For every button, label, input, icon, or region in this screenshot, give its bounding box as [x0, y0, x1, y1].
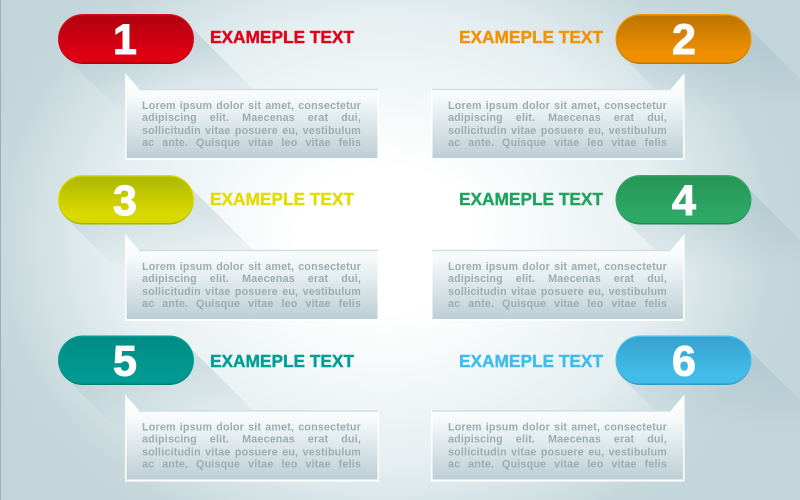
callout box 2: Lorem ipsum dolor sit amet, consectetur [448, 100, 667, 112]
pill: number 5: 5 [113, 338, 137, 386]
heading 4: EXAMEPLE TEXT [459, 189, 603, 209]
pill: number 6 [616, 336, 752, 386]
callout box 1: ac ante. Quisque vitae leo vitae felis [142, 137, 361, 149]
pill: number 3: 3 [113, 177, 137, 225]
callout box 4: Lorem ipsum dolor sit amet, consectetur [448, 261, 667, 273]
callout box 1: Lorem ipsum dolor sit amet, consectetur [142, 100, 361, 112]
callout box 5: ac ante. Quisque vitae leo vitae felis [142, 459, 361, 471]
callout box 3: ac ante. Quisque vitae leo vitae felis [142, 298, 361, 310]
panel: item 5 [58, 336, 379, 482]
heading 5: EXAMEPLE TEXT [210, 351, 354, 371]
callout box 6: sollicitudin vitae posuere eu, vestibulum [448, 446, 667, 458]
panel: item 2 [431, 14, 800, 160]
panel: item 4 [431, 175, 800, 321]
panel: item 1 [58, 14, 379, 160]
callout box 3 [125, 234, 379, 321]
heading 6: EXAMEPLE TEXT [459, 351, 603, 371]
callout box 5 [125, 394, 379, 482]
pill: number 1 [58, 14, 194, 64]
pill: number 6: 6 [672, 338, 696, 386]
pill: number 2 [616, 14, 752, 64]
pill: number 2: 2 [672, 16, 696, 64]
callout box 2: sollicitudin vitae posuere eu, vestibulum [448, 125, 667, 137]
callout box 2: adipiscing elit. Maecenas erat dui, [448, 112, 667, 124]
callout box 6: ac ante. Quisque vitae leo vitae felis [448, 459, 667, 471]
callout box 6 [431, 394, 684, 482]
panel: item 3 [58, 175, 379, 321]
callout box 2: ac ante. Quisque vitae leo vitae felis [448, 137, 667, 149]
pill: number 4: 4 [672, 177, 696, 225]
callout box 4: sollicitudin vitae posuere eu, vestibulum [448, 286, 667, 298]
callout box 3: adipiscing elit. Maecenas erat dui, [142, 273, 361, 285]
pill: number 1: 1 [113, 16, 137, 64]
callout box 1 [125, 73, 379, 160]
callout box 6: adipiscing elit. Maecenas erat dui, [448, 434, 667, 446]
callout box 4: adipiscing elit. Maecenas erat dui, [448, 273, 667, 285]
heading 1: EXAMEPLE TEXT [210, 27, 354, 47]
panel: item 6 [431, 336, 800, 482]
pill: number 4 [616, 175, 752, 225]
callout box 5: Lorem ipsum dolor sit amet, consectetur [142, 422, 361, 434]
heading 3: EXAMEPLE TEXT [210, 189, 354, 209]
pill: number 3 [58, 175, 194, 225]
callout box 4 [431, 234, 684, 321]
heading 2: EXAMEPLE TEXT [459, 27, 603, 47]
callout box 2 [431, 73, 684, 160]
callout box 1: adipiscing elit. Maecenas erat dui, [142, 112, 361, 124]
callout box 3: sollicitudin vitae posuere eu, vestibulum [142, 286, 361, 298]
pill: number 5 [58, 336, 194, 386]
callout box 4: ac ante. Quisque vitae leo vitae felis [448, 298, 667, 310]
callout box 5: sollicitudin vitae posuere eu, vestibulum [142, 446, 361, 458]
callout box 5: adipiscing elit. Maecenas erat dui, [142, 434, 361, 446]
callout box 3: Lorem ipsum dolor sit amet, consectetur [142, 261, 361, 273]
callout box 6: Lorem ipsum dolor sit amet, consectetur [448, 422, 667, 434]
callout box 1: sollicitudin vitae posuere eu, vestibulum [142, 125, 361, 137]
